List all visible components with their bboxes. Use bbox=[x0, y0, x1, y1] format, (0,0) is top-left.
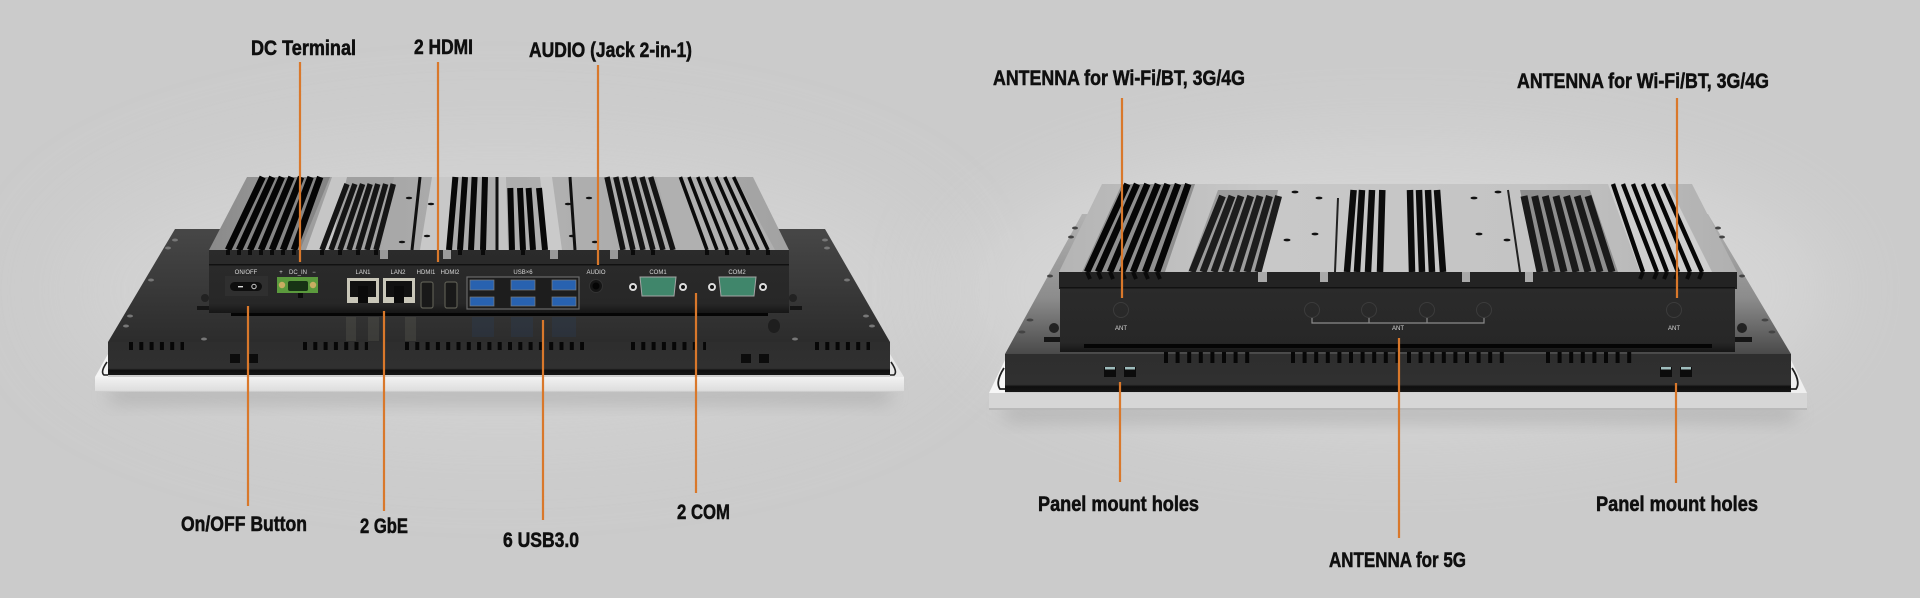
label: 6 USB3.0: 6 USB3.0 bbox=[503, 529, 579, 552]
DC terminal: + bbox=[279, 270, 283, 276]
white front bezel bbox=[989, 360, 1807, 410]
heatsink bbox=[209, 177, 789, 250]
label: 2 COM: 2 COM bbox=[677, 501, 730, 524]
COM ports: COM1 bbox=[649, 270, 667, 276]
leader lines: right device bbox=[1120, 98, 1677, 538]
frame with vents bbox=[1005, 354, 1791, 392]
panel mount holes bbox=[1104, 367, 1692, 377]
LAN ports: LAN1 bbox=[355, 270, 371, 276]
label: DC Terminal: DC Terminal bbox=[251, 37, 356, 60]
USB ports bbox=[467, 270, 579, 309]
COM ports: COM2 bbox=[728, 270, 746, 276]
DC terminal: DC_IN bbox=[289, 270, 307, 276]
DC terminal: − bbox=[312, 270, 316, 276]
label: 2 HDMI: 2 HDMI bbox=[414, 36, 473, 59]
ON/OFF button bbox=[225, 270, 268, 296]
COM ports bbox=[630, 270, 766, 296]
ON/OFF button: ON/OFF bbox=[235, 270, 258, 276]
reflections under box bbox=[346, 317, 576, 341]
HDMI ports bbox=[417, 270, 460, 308]
heatsink bbox=[1059, 184, 1737, 272]
antenna holes and labels: ANT bbox=[1392, 326, 1404, 332]
label: antenna right: ANTENNA for Wi-Fi/BT, 3G/4G bbox=[1517, 70, 1769, 93]
white front bezel bbox=[95, 354, 904, 392]
HDMI ports: HDMI1 bbox=[417, 270, 436, 276]
label: On/OFF Button: On/OFF Button bbox=[181, 513, 307, 536]
label: antenna for 5G: ANTENNA for 5G bbox=[1329, 549, 1466, 572]
frame with vents bbox=[108, 342, 890, 375]
I/O box front bbox=[209, 250, 789, 316]
label: panel mount holes right: Panel mount holes bbox=[1596, 493, 1758, 516]
label: 2 GbE: 2 GbE bbox=[360, 515, 408, 538]
antenna holes and labels: ANT bbox=[1115, 326, 1127, 332]
label: antenna left: ANTENNA for Wi-Fi/BT, 3G/4G bbox=[993, 67, 1245, 90]
audio jack bbox=[586, 270, 606, 292]
panel: left device rear I/O view bbox=[95, 177, 904, 392]
back plate bbox=[1005, 214, 1791, 354]
antenna box front bbox=[1059, 272, 1737, 352]
label: panel mount holes left: Panel mount holes bbox=[1038, 493, 1199, 516]
panel: right device antenna view bbox=[989, 184, 1807, 410]
USB ports: USB×6 bbox=[513, 270, 533, 276]
DC terminal bbox=[277, 270, 318, 298]
LAN ports: LAN2 bbox=[390, 270, 406, 276]
antenna holes and labels: ANT bbox=[1668, 326, 1680, 332]
HDMI ports: HDMI2 bbox=[441, 270, 460, 276]
back plate bbox=[108, 229, 890, 342]
antenna holes and labels bbox=[1114, 302, 1682, 332]
audio jack: AUDIO bbox=[586, 270, 606, 276]
leader lines: left device bbox=[248, 62, 696, 520]
label: AUDIO: AUDIO (Jack 2-in-1) bbox=[529, 39, 692, 62]
LAN ports bbox=[347, 270, 415, 303]
